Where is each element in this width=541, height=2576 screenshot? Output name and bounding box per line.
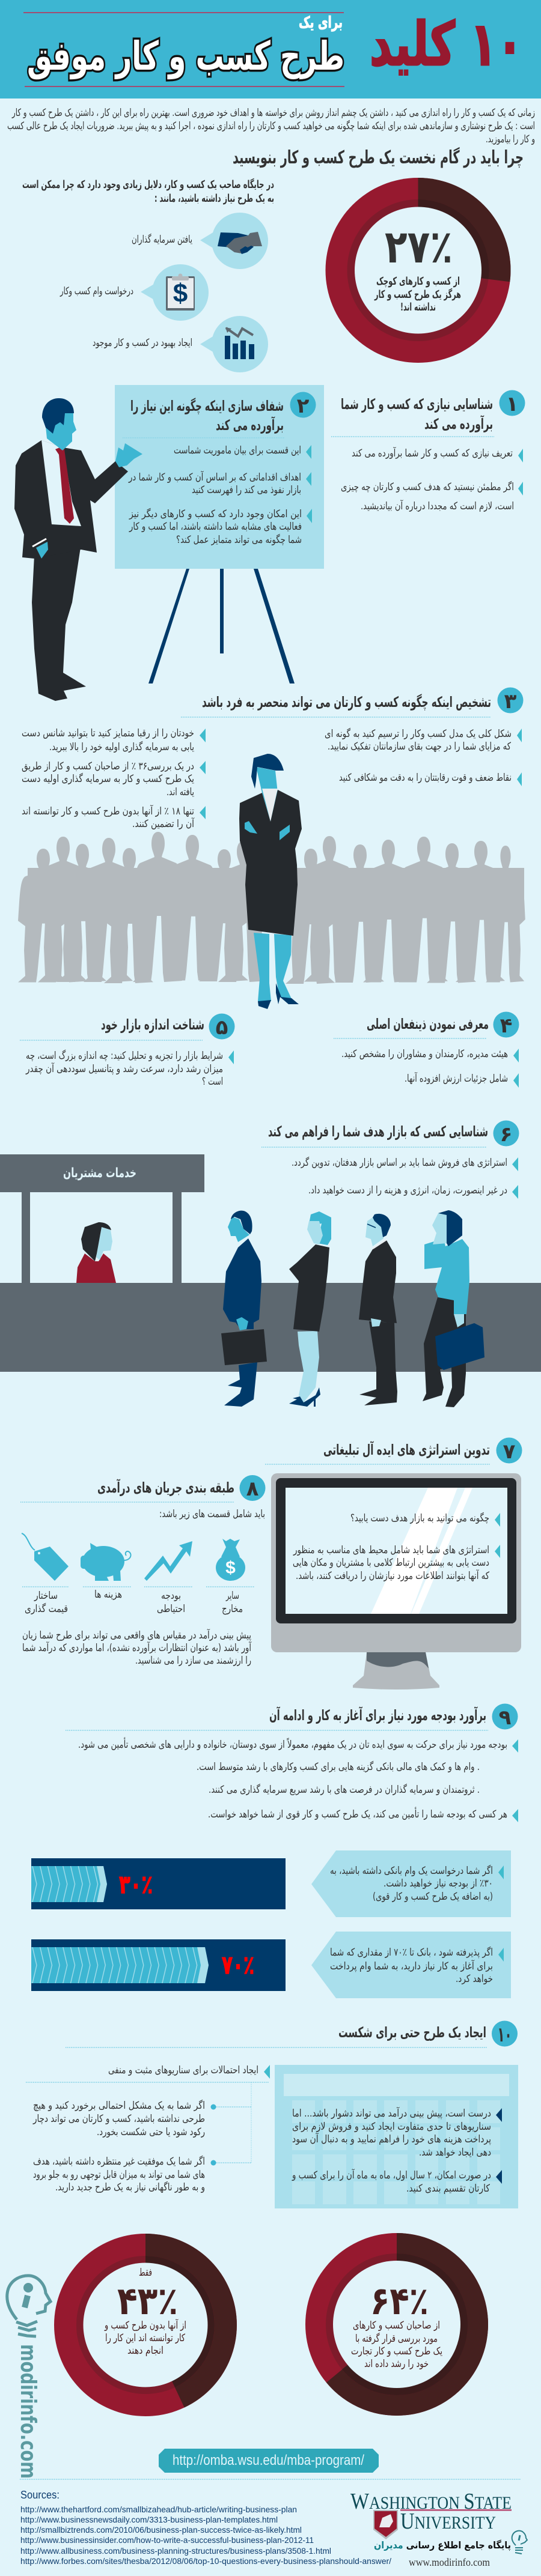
number badge 8 bbox=[239, 1475, 266, 1501]
number badge 9: ۹ bbox=[499, 1706, 512, 1730]
donut chart: 43%: فقط bbox=[139, 2267, 152, 2279]
reasons lead text bbox=[22, 178, 274, 205]
revenue forecast paragraph: پیش بینی درآمد در مقیاس های واقعی می تواند برای طرح شما زیان bbox=[22, 1628, 251, 1641]
number badge 4 bbox=[493, 1011, 519, 1038]
panel: section 2 board: فعالیت های مشابه شما داشته باشند، اما کسب و کار bbox=[129, 521, 302, 533]
sources list bbox=[20, 2489, 391, 2566]
panel: section 2 board: اهداف اقداماتی که بر اساس آن کسب و کار شما در bbox=[128, 470, 301, 483]
icon labels: سایر bbox=[225, 1590, 239, 1602]
icon: clipboard with dollar bbox=[166, 274, 195, 311]
illustration: crowd bbox=[18, 832, 525, 984]
link button: http://omba.wsu.edu/mba-program/ bbox=[173, 2452, 364, 2468]
donut chart: 64% bbox=[305, 2233, 488, 2416]
section 9 bbox=[66, 1703, 518, 1822]
number badge 7: ۷ bbox=[503, 1440, 516, 1464]
logo: Washington State University: UNIVERSITY bbox=[400, 2509, 496, 2534]
illustration: standout woman bbox=[239, 754, 302, 1009]
scenario list: طرحی نداشته باشید، کسب و کارتان می تواند دچار bbox=[32, 2113, 205, 2125]
number badge 4: ۴ bbox=[500, 1014, 512, 1038]
panel: calendar with forecast text: کارتان تقسیم بندی کنید. bbox=[406, 2183, 491, 2195]
section 5 bbox=[20, 1014, 234, 1088]
number badge 6: ۶ bbox=[500, 1123, 512, 1147]
icon labels: مخارج bbox=[222, 1603, 243, 1615]
donut chart: 64%: خود را رشد داده اند bbox=[364, 2358, 429, 2370]
number badge 2 bbox=[290, 392, 316, 418]
icon: small head lightbulb bbox=[512, 2531, 527, 2554]
donut chart: 43%: کار توانسته اند این کار را bbox=[105, 2332, 186, 2344]
bar: 70 percent bbox=[31, 1939, 286, 1991]
section 3: در یک بررسی۳۶ ٪ از صاحبان کسب و کار از طریق bbox=[22, 760, 194, 772]
section 1: برآورده می کند bbox=[424, 415, 493, 432]
donut chart: 27%: ۲۷٪ bbox=[385, 220, 453, 273]
sources list: http://www.businessnewsdaily.com/3313-business-plan-templates.html bbox=[20, 2515, 278, 2524]
revenue forecast paragraph: آور باشد (به عنوان انتظارات برآورده نشده)، اما مواردی که درآمد شما bbox=[22, 1641, 252, 1654]
reason 1: find investors: یافتن سرمایه گذاران bbox=[132, 233, 192, 246]
donut chart: 64%: از صاحبان کسب و کارهای bbox=[353, 2320, 440, 2332]
number badge 1 bbox=[499, 390, 525, 416]
number badge 5: ۵ bbox=[216, 1016, 228, 1040]
section 3: یابی به سرمایه گذاری اولیه خود را بالا ببرید. bbox=[49, 741, 194, 753]
donut chart: 27%: نداشته اند! bbox=[400, 301, 436, 314]
icon: shield bbox=[373, 2510, 398, 2539]
illustration: customer service counter bbox=[0, 1154, 541, 1372]
panel: calendar with forecast text: سناریوهای تا حدی متفاوت ایجاد کنید و فروش لازم برای bbox=[292, 2121, 491, 2133]
modirinfo footer credit: پایگاه جامع اطلاع رسانی مدیران bbox=[374, 2539, 511, 2551]
logo: modirinfo vertical bbox=[7, 2276, 50, 2479]
panel: section 2 board: بازار نفوذ می کند را فهرست کنید bbox=[192, 484, 301, 496]
icon: price tag bbox=[22, 1533, 69, 1581]
icon labels: قیمت گذاری bbox=[25, 1602, 68, 1615]
logo: Washington State University: WASHINGTON STATE bbox=[350, 2489, 512, 2514]
reasons lead text: در جایگاه صاحب یک کسب و کار، دلایل زیادی وجود دارد که چرا ممکن است bbox=[22, 178, 274, 191]
illustration: presenting man bbox=[14, 398, 142, 701]
illustration: queue person 2 bbox=[289, 1211, 331, 1407]
donut chart: 43%: انجام دهند bbox=[127, 2345, 164, 2357]
panel: section 2 board: برآورده می کند bbox=[216, 416, 284, 434]
reason 1: find investors bbox=[132, 213, 268, 269]
panel: section 2 board: این امکان وجود دارد که کسب و کارهای دیگر نیز bbox=[129, 508, 302, 520]
callout: 70 percent loan: اگر پذیرفته شود ، بانک تا ٪۷۰ از مقداری که شما bbox=[330, 1946, 493, 1959]
panel: section 2 board: شفاف سازی اینکه چگونه این نیاز را bbox=[130, 398, 284, 414]
icon: handshake bbox=[218, 232, 262, 254]
donut chart: 43%: ۴۳٪ bbox=[117, 2279, 178, 2324]
panel: calendar with forecast text: درست است، پیش بینی درآمد می تواند دشوار باشد... اما bbox=[292, 2106, 491, 2120]
donut chart: 64%: یک طرح کسب و کار تجارت bbox=[351, 2345, 442, 2357]
callout: 30 percent loan: اگر شما درخواست یک وام بانکی داشته باشید، به bbox=[330, 1864, 493, 1877]
sources list: Sources: bbox=[20, 2489, 60, 2501]
donut chart: 27%: هرگز یک طرح کسب و کار bbox=[374, 288, 461, 301]
donut chart: 43% bbox=[54, 2234, 237, 2416]
sources list: http://smallbiztrends.com/2010/06/business-plan-success-twice-as-likely.html bbox=[20, 2525, 302, 2535]
monitor stand bbox=[353, 1652, 439, 1690]
section 5: شرایط بازار را تجزیه و تحلیل کنید: چه اندازه بزرگ است، چه bbox=[26, 1049, 223, 1062]
icon labels bbox=[25, 1589, 243, 1615]
section 4: شامل جزئیات ارزش افزوده آنها. bbox=[405, 1071, 508, 1085]
number badge 2: ۲ bbox=[297, 394, 310, 418]
number badge 10 bbox=[492, 2020, 518, 2047]
callout: 30 percent loan: (به اضافه یک طرح کسب و کار قوی) bbox=[373, 1891, 493, 1903]
number badge 7 bbox=[497, 1438, 522, 1464]
section 5: میزان رشد دارد، سرعت رشد و پتانسیل سوددهی آن چقدر bbox=[25, 1062, 223, 1075]
reason 2: business loan: درخواست وام کسب وکار bbox=[60, 285, 133, 297]
revenue forecast paragraph bbox=[22, 1628, 252, 1667]
monitor with ad strategy text: استراتژی های شما باید شامل محیط های مناسب به منظور bbox=[293, 1544, 489, 1556]
reasons lead text: به یک طرح نیاز داشته باشید، مانند : bbox=[154, 192, 274, 205]
sources list: http://www.forbes.com/sites/thesba/2012/08/06/top-10-questions-every-business-planshould-answer/ bbox=[20, 2556, 391, 2566]
scenario list: اگر شما به یک مشکل احتمالی برخورد کنید و هیچ bbox=[33, 2099, 205, 2112]
scenario list: و به طور ناگهانی نیاز به یک طرح جدید دارید. bbox=[55, 2181, 205, 2193]
modirinfo footer credit bbox=[374, 2531, 527, 2568]
callout: 70 percent loan: خواهد کرد. bbox=[456, 1973, 493, 1985]
intro paragraph bbox=[7, 107, 535, 145]
number badge 1: ۱ bbox=[506, 392, 518, 416]
section 1 bbox=[331, 390, 525, 512]
icon: growth arrow bbox=[144, 1541, 192, 1581]
section 3: تنها ۱۸ ٪ از آنها بدون طرح کسب و کار توانسته اند bbox=[22, 804, 194, 817]
donut chart: 43%: از آنها بدون طرح کسب و bbox=[104, 2318, 186, 2332]
monitor with ad strategy text: که آنها بتوانند اطلاعات مورد نیازشان را دریافت کنند، باشد. bbox=[296, 1569, 490, 1582]
section 10 heading bbox=[66, 2020, 518, 2047]
callout: 30 percent loan: ٪۳۰ از بودجه نیاز خواهید داشت. bbox=[384, 1877, 493, 1890]
callout: 70 percent loan bbox=[311, 1932, 511, 1998]
scenario list: اگر شما یک موفقیت غیر منتظره داشته باشید، هدف bbox=[33, 2155, 205, 2168]
scenario list: رکود شود یا حتی شکست بخورد. bbox=[97, 2126, 205, 2138]
panel: calendar with forecast text: پرداخت هزینه های خود را فراهم نمایید و به دنبال آن سود bbox=[292, 2132, 491, 2145]
section 3: یافته اند. bbox=[167, 786, 194, 798]
donut chart: 27%: از کسب و کارهای کوچک bbox=[376, 275, 460, 288]
panel: calendar with forecast text: در صورت امکان، ۲ سال اول، ماه به ماه آن را برای کسب و bbox=[292, 2168, 491, 2181]
section 6 bbox=[261, 1121, 519, 1199]
reason 2: business loan bbox=[60, 264, 209, 321]
number badge 10: ۱۰ bbox=[498, 2023, 512, 2047]
section 8: باید شامل قسمت های زیر باشد: bbox=[159, 1508, 265, 1520]
donut chart: 27% bbox=[326, 178, 511, 363]
number badge 3: ۳ bbox=[504, 689, 517, 714]
icon labels: احتیاطی bbox=[157, 1603, 185, 1615]
panel: section 2 board: شما چگونه می تواند متمایز عمل کند؟ bbox=[176, 533, 302, 546]
modirinfo footer credit: www.modirinfo.com bbox=[409, 2556, 490, 2568]
number badge 3 bbox=[498, 687, 523, 714]
clerk bbox=[76, 1222, 116, 1283]
icon: clipboard with dollar: $ bbox=[173, 279, 188, 308]
callout: 70 percent loan: برای آغاز به کار نیاز دارید، به شما وام پرداخت bbox=[330, 1959, 493, 1972]
section 3: یک طرح کسب و کار به سرمایه گذاری اولیه دست bbox=[22, 772, 194, 785]
panel: calendar with forecast text: دهی ایجاد خواهد شد. bbox=[419, 2147, 491, 2159]
illustration: queue person 1 bbox=[221, 1211, 267, 1407]
title: successful business plan: طرح کسب و کار موفق bbox=[27, 33, 344, 80]
sources list: http://www.allbusiness.com/business-planning-structures/business-plans/3508-1.html bbox=[20, 2546, 331, 2556]
icon: head lightbulb bbox=[7, 2276, 50, 2336]
illustration: queue person 4 bbox=[423, 1210, 484, 1407]
panel: section 2 board: این قسمت برای بیان ماموریت شماست bbox=[174, 444, 301, 456]
title: for a: برای یک bbox=[299, 14, 343, 32]
revenue forecast paragraph: را ارزشمند می سازد را می شناسید. bbox=[135, 1655, 251, 1667]
icon labels: ساختار bbox=[34, 1590, 58, 1602]
section 5: شناخت اندازه بازار خود bbox=[101, 1016, 204, 1033]
number badge 8: ۸ bbox=[246, 1477, 259, 1501]
bar: 70 percent: ۷۰٪ bbox=[222, 1950, 254, 1980]
easel legs bbox=[148, 569, 295, 683]
icon labels: بودجه bbox=[161, 1590, 181, 1602]
section 4 bbox=[334, 1011, 519, 1088]
section 3: آن را تضمین کنند. bbox=[132, 817, 195, 830]
donut chart: 64%: ۶۴٪ bbox=[370, 2279, 429, 2324]
logo: Washington State University bbox=[350, 2489, 512, 2539]
number badge 5 bbox=[209, 1014, 234, 1040]
number badge 6 bbox=[493, 1121, 519, 1147]
link button bbox=[159, 2449, 379, 2473]
bar: 30 percent bbox=[31, 1858, 286, 1909]
scenario list: ایجاد احتمالات برای سناریوهای مثبت و منفی bbox=[108, 2064, 258, 2076]
monitor with ad strategy text: چگونه می توانید به بازار هدف دست یابید؟ bbox=[350, 1512, 489, 1524]
bar: 30 percent: ۳۰٪ bbox=[119, 1870, 153, 1899]
sources list: http://www.thehartford.com/smallbizahead/hub-article/writing-business-plan bbox=[20, 2505, 297, 2514]
section 3 bbox=[22, 687, 523, 830]
section 5: است ؟ bbox=[202, 1076, 223, 1088]
section 8: طبقه بندی جریان های درآمدی bbox=[97, 1479, 234, 1496]
donut chart: 64%: مورد بررسی قرار گرفته با bbox=[355, 2332, 438, 2345]
icon labels: هزینه ها bbox=[94, 1589, 122, 1601]
panel: section 2 board bbox=[115, 385, 324, 569]
icon: money bag bbox=[216, 1539, 245, 1581]
logo: modirinfo vertical: modirinfo.com bbox=[16, 2344, 40, 2479]
illustration: queue person 3 bbox=[359, 1214, 397, 1405]
icon: bar chart with arrow bbox=[225, 327, 254, 359]
icon: piggy bank bbox=[81, 1543, 131, 1581]
callout: 30 percent loan bbox=[311, 1850, 511, 1917]
section 8 bbox=[20, 1475, 266, 1520]
section 7 bbox=[265, 1438, 522, 1464]
header banner bbox=[0, 0, 541, 98]
sources list: http://www.businessinsider.com/how-to-write-a-successful-business-plan-2012-11 bbox=[20, 2535, 314, 2545]
panel: calendar with forecast text bbox=[275, 2065, 518, 2208]
monitor with ad strategy text bbox=[271, 1473, 521, 1690]
title: 10 keys: ۱۰ کلید bbox=[370, 9, 523, 79]
scenario list bbox=[26, 2064, 270, 2193]
number badge 9 bbox=[492, 1703, 518, 1730]
sign text: خدمات مشتریان bbox=[63, 1166, 136, 1181]
reason 3: improve business: ایجاد بهبود در کسب و کار موجود bbox=[93, 337, 192, 349]
section 3: خودتان را از رقبا متمایز کنید تا بتوانید شانس دست bbox=[22, 727, 194, 739]
reason 3: improve business bbox=[93, 316, 268, 372]
scenario list: های شما می تواند به میزان قابل توجهی رو به جلو برود bbox=[33, 2169, 205, 2181]
icon: money bag: $ bbox=[225, 1558, 236, 1578]
